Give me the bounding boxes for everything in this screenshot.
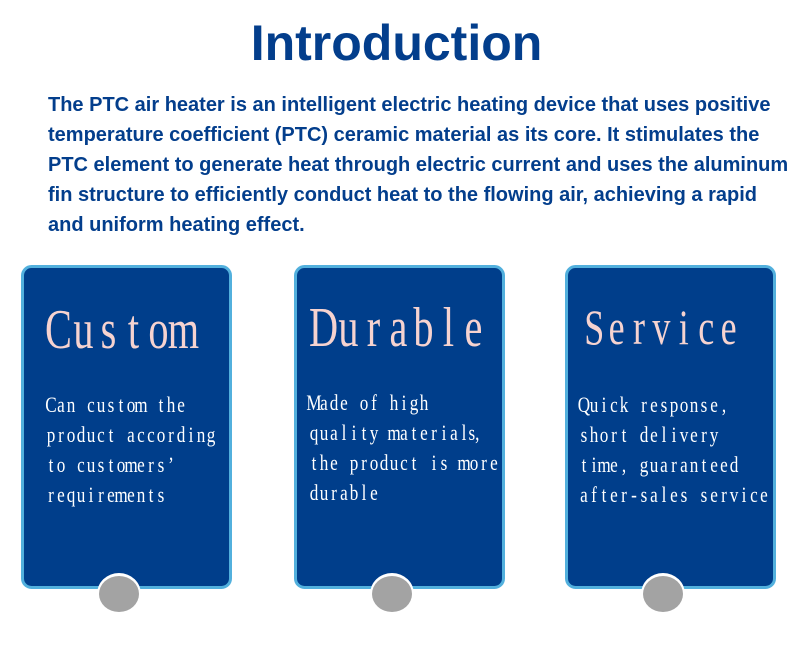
title: Introduction xyxy=(251,15,542,71)
text: custom: product according xyxy=(47,423,215,448)
text: service xyxy=(578,393,768,508)
icon: custom circle xyxy=(97,573,141,615)
text: custom xyxy=(45,393,215,508)
icon: service circle xyxy=(641,573,685,615)
text: custom: Can custom the xyxy=(45,393,185,418)
panel: durable xyxy=(296,266,504,615)
text: service: time, guaranteed xyxy=(582,453,738,478)
text: custom: to customers’ xyxy=(49,453,174,478)
icon: durable circle xyxy=(370,573,414,615)
heading: durable: Durable xyxy=(309,297,482,359)
text: durable: quality materials, xyxy=(310,421,479,446)
text: durable: Made of high xyxy=(306,391,428,416)
intro paragraph: The PTC air heater is an intelligent electric heating device that uses positive xyxy=(48,94,770,116)
intro paragraph: and uniform heating effect. xyxy=(48,214,305,236)
intro paragraph xyxy=(48,94,788,236)
intro paragraph: PTC element to generate heat through electric current and uses the aluminum xyxy=(48,154,788,176)
text: durable xyxy=(306,391,498,506)
heading: service: Service xyxy=(584,300,737,355)
text: custom: requirements xyxy=(48,483,164,508)
text: durable: durable xyxy=(310,481,378,506)
intro paragraph: temperature coefficient (PTC) ceramic material as its core. It stimulates the xyxy=(48,124,759,146)
panel: service xyxy=(566,266,774,615)
panel: custom xyxy=(22,266,230,615)
intro paragraph: fin structure to efficiently conduct heat to the flowing air, achieving a rapid xyxy=(48,184,757,206)
text: service: Quick response, xyxy=(578,393,726,418)
text: durable: the product is more xyxy=(312,451,498,476)
heading: custom: Custom xyxy=(45,299,199,361)
text: service: after-sales service xyxy=(580,483,768,508)
text: service: short delivery xyxy=(581,423,718,448)
